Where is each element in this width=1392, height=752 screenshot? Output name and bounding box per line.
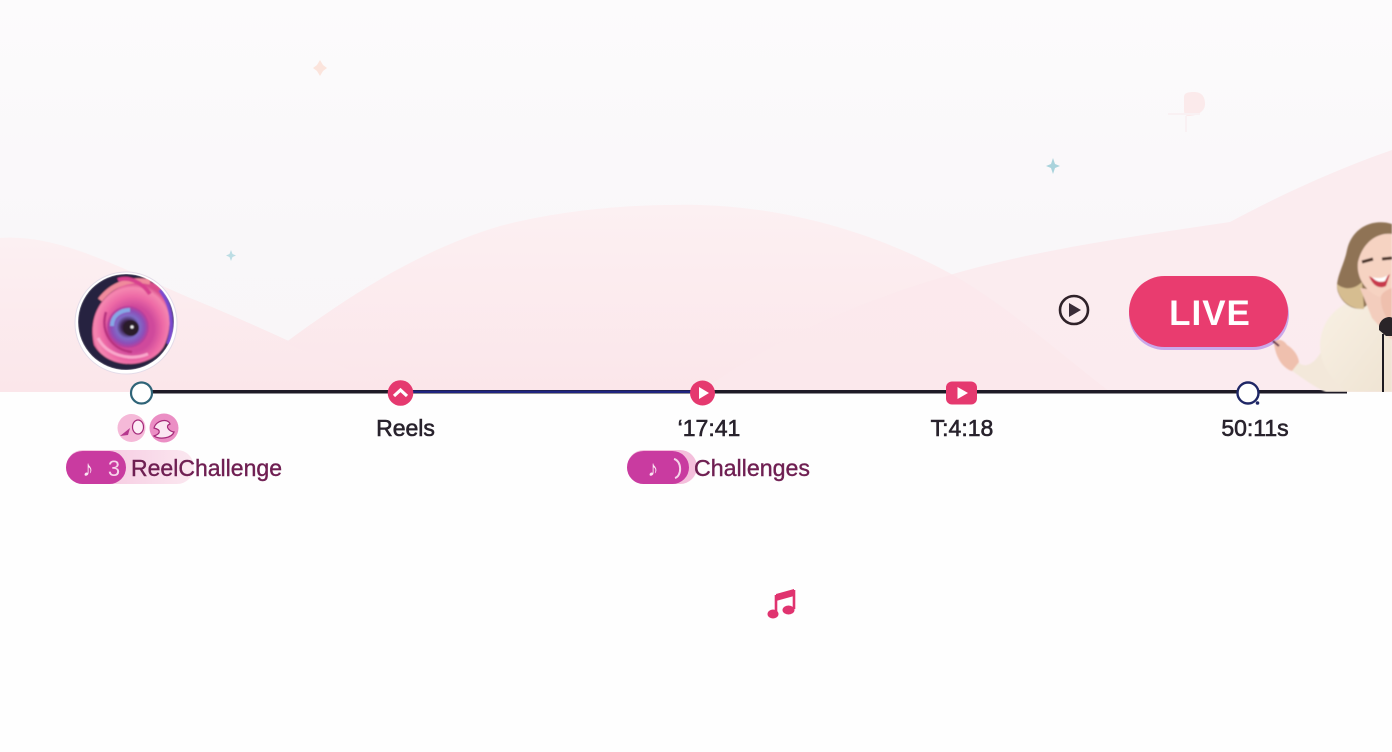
LIVE button: LIVE <box>1169 294 1251 333</box>
label: 17:41: ‘17:41 <box>678 415 740 441</box>
node: play circle <box>690 380 715 406</box>
icon: music note pink <box>768 589 794 618</box>
node: search ring <box>1238 382 1259 405</box>
pill: ReelChallenge <box>66 450 282 484</box>
label: Reels: Reels <box>376 415 435 441</box>
sparkle: teal right <box>1046 158 1060 174</box>
pill text: ReelChallenge <box>131 455 282 481</box>
label: 50:11s: 50:11s <box>1221 415 1289 441</box>
neck and chest <box>1360 288 1392 340</box>
small round icons <box>118 414 178 442</box>
sparkle: peach <box>313 60 327 76</box>
presenter illustration <box>1273 222 1392 392</box>
node: start ring <box>131 382 152 404</box>
node: reels chevron <box>388 380 413 406</box>
background pink hills <box>0 150 1392 392</box>
torso <box>1320 298 1392 392</box>
background band <box>0 0 1392 392</box>
fingernail <box>1273 341 1279 346</box>
microphone <box>1379 317 1392 336</box>
hand <box>1274 340 1299 371</box>
icon: play outline <box>1060 296 1088 324</box>
icon: music note: ♪ <box>648 456 658 481</box>
avatar: swirling lens <box>75 272 177 374</box>
faint pink badge <box>1168 92 1205 132</box>
pill text: Challenges <box>694 455 810 481</box>
pill: Challenges <box>627 450 810 484</box>
face <box>1358 234 1392 298</box>
label: T:4:18: T:4:18 <box>931 415 993 441</box>
LIVE button <box>1129 276 1289 350</box>
arm <box>1292 354 1347 392</box>
hair <box>1337 222 1392 309</box>
pill digit: 3 <box>108 456 120 481</box>
hand at chin <box>1381 288 1392 318</box>
timeline <box>150 390 1347 394</box>
icon: music note: ♪ <box>82 456 94 481</box>
sparkle: teal left <box>226 250 236 261</box>
pill arc <box>674 459 680 478</box>
node: play rounded square <box>946 382 977 404</box>
